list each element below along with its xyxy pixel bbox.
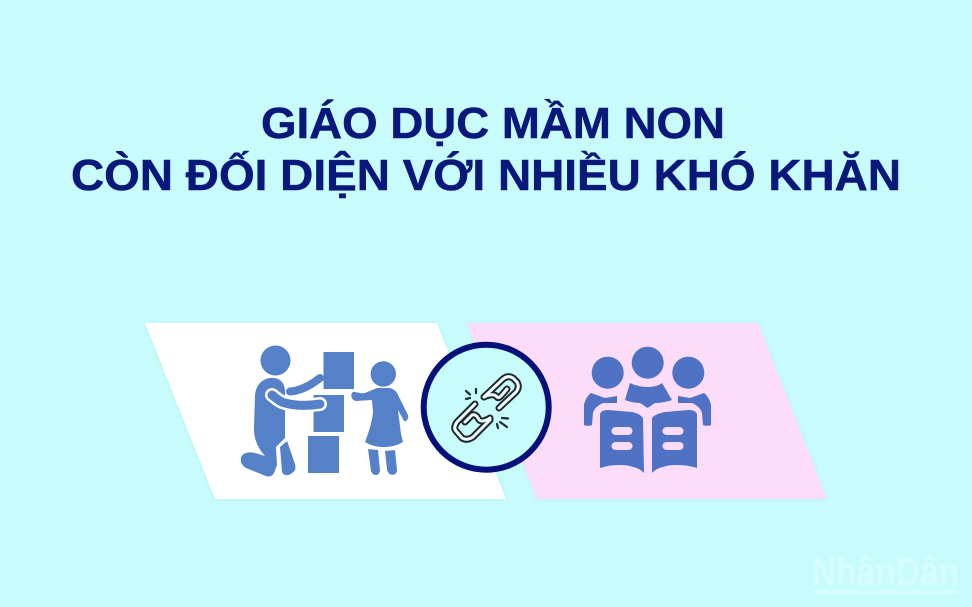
panel: white parallelogram with adult and child icon	[145, 323, 506, 499]
icon: adult and child stacking blocks	[241, 346, 408, 477]
icon: broken chain in circle	[424, 345, 549, 470]
title: CÒN ĐỐI DIỆN VỚI NHIỀU KHÓ KHĂN	[71, 149, 901, 200]
title: GIÁO DỤC MẦM NON	[261, 98, 725, 148]
panel: pink parallelogram with reading group icon	[467, 323, 827, 499]
icon: broken chain link	[455, 377, 518, 439]
title	[71, 98, 901, 200]
icon: group reading a book	[584, 347, 711, 473]
